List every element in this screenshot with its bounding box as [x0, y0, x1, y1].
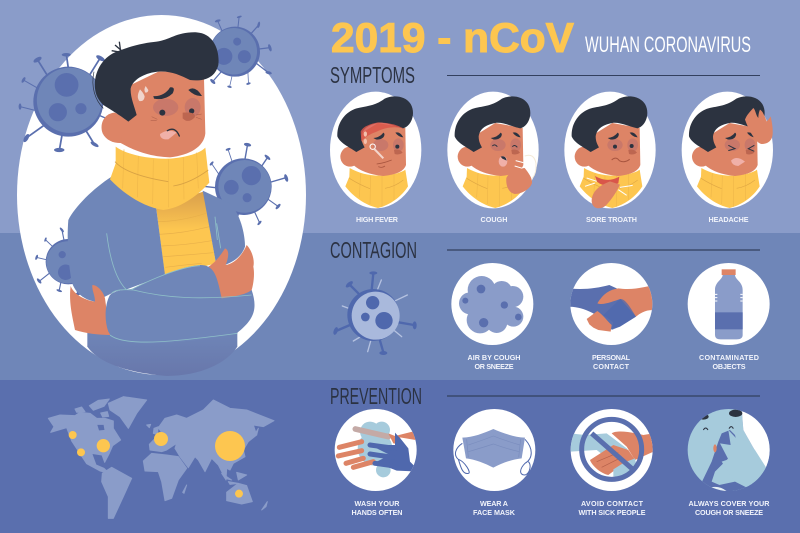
labels: prevention	[352, 499, 770, 517]
ear	[102, 113, 130, 143]
head: headache	[682, 92, 773, 208]
heading: prevention: PREVENTION	[330, 383, 422, 409]
nose	[183, 113, 195, 121]
wrinkles	[151, 114, 202, 121]
yellow jumper	[156, 192, 216, 277]
virus right	[186, 130, 300, 244]
scarf ribs	[123, 149, 198, 207]
mouth	[160, 131, 177, 139]
icon: air by cough	[451, 263, 533, 345]
labels: contagion: AIR BY COUGH	[468, 353, 520, 362]
labels: contagion: OR SNEEZE	[474, 362, 514, 371]
labels: symptoms	[356, 215, 749, 224]
outbreak markers	[69, 431, 245, 498]
labels: symptoms: HIGH FEVER	[356, 215, 399, 224]
labels: symptoms: SORE TROATH	[586, 215, 637, 224]
labels: contagion	[468, 353, 759, 371]
scarf	[110, 147, 209, 210]
jumper ribs	[157, 213, 213, 267]
labels: contagion: CONTAMINATED	[699, 353, 759, 362]
crossed forearm	[106, 265, 255, 343]
labels: prevention: FACE MASK	[473, 508, 516, 517]
virus lower left	[27, 220, 110, 302]
scarf fold	[115, 162, 208, 186]
world map with outbreak markers	[48, 397, 274, 518]
icon: bottle	[688, 263, 770, 345]
hand left	[70, 285, 110, 335]
labels: symptoms: HEADACHE	[708, 215, 749, 224]
hair	[95, 32, 219, 122]
illustration: sick man with viruses	[19, 7, 300, 376]
labels: prevention: ALWAYS COVER YOUR	[688, 499, 770, 508]
labels: prevention: HANDS OFTEN	[352, 508, 402, 517]
symptom heads	[330, 92, 773, 208]
icon: wash hands	[335, 409, 420, 491]
body	[87, 330, 237, 376]
virus top right	[191, 7, 280, 96]
right sleeve	[203, 191, 245, 265]
labels: prevention: WITH SICK PEOPLE	[578, 508, 646, 517]
title: 2019 - nCoV	[331, 14, 574, 61]
icon: cover cough	[687, 408, 773, 493]
head: sore throat	[564, 92, 656, 208]
icon: face mask	[453, 409, 535, 491]
labels: prevention: WASH YOUR	[354, 499, 400, 508]
virus top left	[19, 53, 118, 152]
panel: symptoms	[330, 62, 773, 224]
white oval behind character	[17, 15, 306, 375]
labels: prevention: COUGH OR SNEEZE	[695, 508, 763, 517]
sleeve seams	[107, 217, 252, 342]
icon: handshake	[568, 263, 653, 345]
left sleeve and torso	[68, 177, 165, 302]
labels: contagion: OBJECTS	[712, 362, 746, 371]
labels: contagion: PERSONAL	[592, 353, 631, 362]
panel: contagion	[330, 237, 770, 371]
icon: virus	[332, 271, 417, 355]
labels: contagion: CONTACT	[593, 362, 630, 371]
head: high fever	[330, 92, 421, 208]
eyes and brows	[153, 87, 202, 99]
hand right	[208, 245, 254, 299]
icon: avoid contact	[570, 409, 653, 491]
hair tuft	[112, 42, 123, 53]
face	[120, 72, 205, 157]
heading: contagion: CONTAGION	[330, 237, 417, 263]
panel: prevention	[330, 383, 773, 517]
labels: symptoms: COUGH	[480, 215, 508, 224]
sweat drop	[138, 86, 148, 101]
hair outline	[93, 72, 103, 108]
labels: prevention: WEAR A	[480, 499, 508, 508]
labels: prevention: AVOID CONTACT	[581, 499, 644, 508]
continents	[48, 397, 274, 518]
heading: symptoms: SYMPTOMS	[330, 62, 415, 88]
eye shadows	[153, 99, 178, 116]
head: cough	[447, 92, 539, 208]
